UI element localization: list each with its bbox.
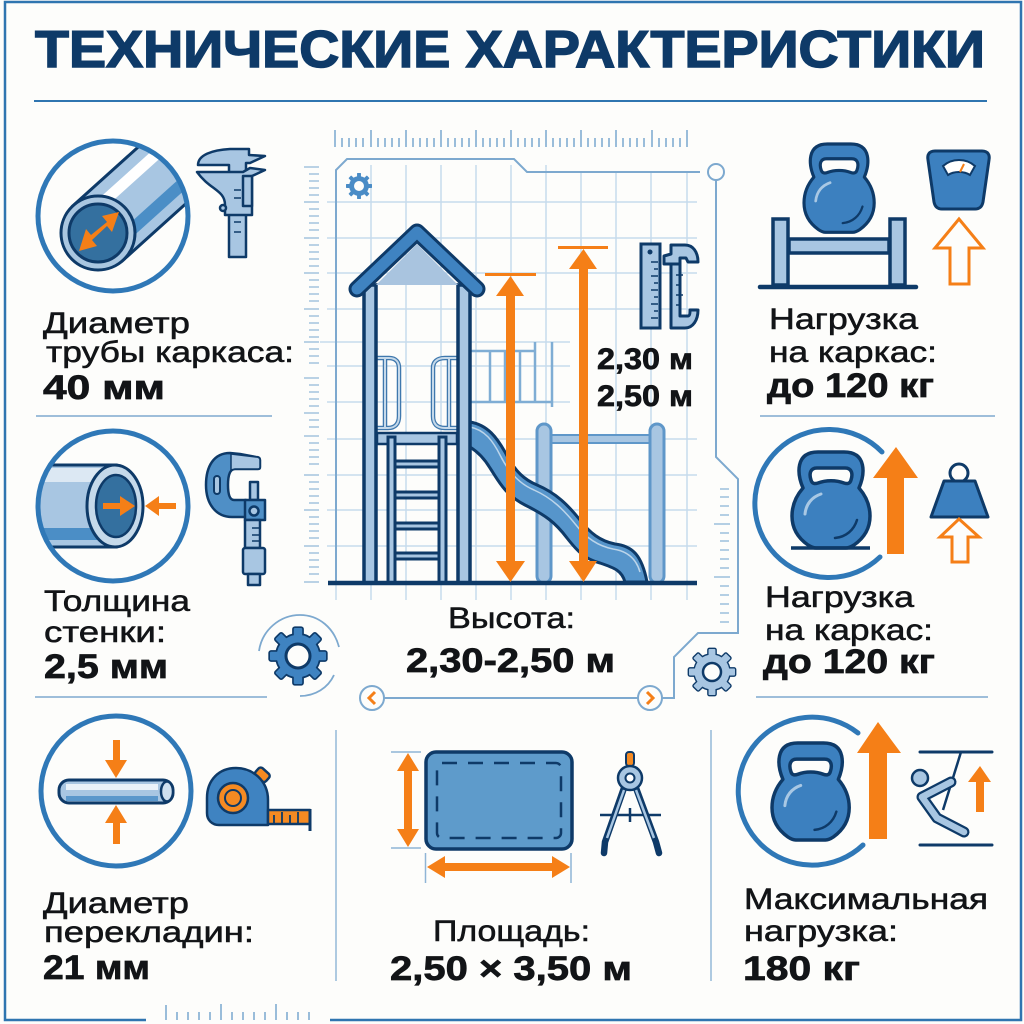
icon: up arrow xyxy=(873,447,918,554)
label: Нагрузка xyxy=(765,581,914,614)
panel: crossbar diameter xyxy=(41,716,310,987)
height arrow 2.30 xyxy=(485,273,536,582)
icon: gear with arcs xyxy=(259,615,339,696)
panel: wall thickness xyxy=(30,431,265,686)
label: перекладин: xyxy=(44,916,254,949)
title: ТЕХНИЧЕСКИЕ ХАРАКТЕРИСТИКИ xyxy=(35,21,985,79)
icon: weight xyxy=(931,464,988,517)
icon: pipe in circle xyxy=(36,138,190,294)
platform xyxy=(377,433,457,444)
icon: ruler xyxy=(641,244,660,328)
value: height: 2,30-2,50 м xyxy=(406,642,615,680)
label: height: Высота: xyxy=(448,602,575,635)
blueprint grid xyxy=(320,165,697,600)
icon: scale xyxy=(928,151,989,209)
label: на каркас: xyxy=(769,336,937,369)
panel: frame load 1 xyxy=(760,144,989,405)
label: на каркас: xyxy=(765,614,933,647)
ladder xyxy=(388,437,446,583)
handles xyxy=(377,358,457,428)
icon: hollow up arrow xyxy=(940,519,979,562)
label: Диаметр xyxy=(43,307,190,340)
icon: crossbar in circle xyxy=(41,716,191,866)
icon: right chevron button xyxy=(638,686,662,710)
roof gable xyxy=(376,244,458,285)
fence xyxy=(471,342,552,407)
panel: area xyxy=(390,752,661,988)
label: 2,30 м: 2,30 м xyxy=(597,343,693,376)
label: Площадь: xyxy=(433,915,590,948)
panel: maximum load xyxy=(738,717,992,988)
label: Нагрузка xyxy=(769,303,918,336)
slide xyxy=(470,422,647,582)
top ruler xyxy=(335,130,687,147)
icon: tape measure xyxy=(207,766,310,831)
value: 40 мм xyxy=(43,369,165,407)
icon: hollow up arrow xyxy=(935,219,983,284)
icon: vertical caliper xyxy=(664,245,698,328)
icon: micrometer xyxy=(206,453,265,585)
icon: left chevron button xyxy=(360,686,384,710)
label: Максимальная xyxy=(744,883,988,916)
left ruler xyxy=(304,167,319,582)
icon: climber xyxy=(912,752,992,845)
ground line xyxy=(328,581,697,585)
icon: caliper xyxy=(197,149,265,257)
value: 21 мм xyxy=(43,949,150,987)
roof xyxy=(357,232,477,289)
label: трубы каркаса: xyxy=(46,336,294,369)
icon: kettlebell with ring xyxy=(738,717,863,865)
height arrow 2.50 xyxy=(558,246,608,582)
icon: small gear xyxy=(346,173,372,199)
frame node xyxy=(708,164,724,180)
bottom ruler xyxy=(166,1004,309,1020)
label: стенки: xyxy=(44,616,166,649)
value: 2,5 мм xyxy=(44,648,168,686)
label: Толщина xyxy=(44,585,190,618)
playground illustration xyxy=(328,232,697,583)
panel: frame load 2 xyxy=(755,430,988,681)
value: до 120 кг xyxy=(763,643,935,681)
icon: pipe section xyxy=(30,431,188,581)
icon: compass xyxy=(600,752,661,853)
swing frame xyxy=(537,424,664,583)
value: 180 кг xyxy=(743,950,860,988)
value: 2,50 × 3,50 м xyxy=(390,950,632,988)
icon: outline gear xyxy=(689,649,735,695)
icon: area plan xyxy=(391,752,572,883)
panel: pipe diameter xyxy=(36,138,292,400)
label: 2,50 м: 2,50 м xyxy=(597,380,693,413)
label: Диаметр xyxy=(43,887,189,920)
value: до 120 кг xyxy=(767,367,934,405)
posts xyxy=(364,285,376,583)
icon: up arrow xyxy=(857,722,901,839)
tower xyxy=(357,232,477,583)
blueprint frame xyxy=(336,159,738,698)
icon: kettlebell on rack xyxy=(760,144,916,287)
icon: kettlebell with ring xyxy=(755,430,882,578)
right ruler xyxy=(714,489,730,622)
label: нагрузка: xyxy=(744,915,898,948)
